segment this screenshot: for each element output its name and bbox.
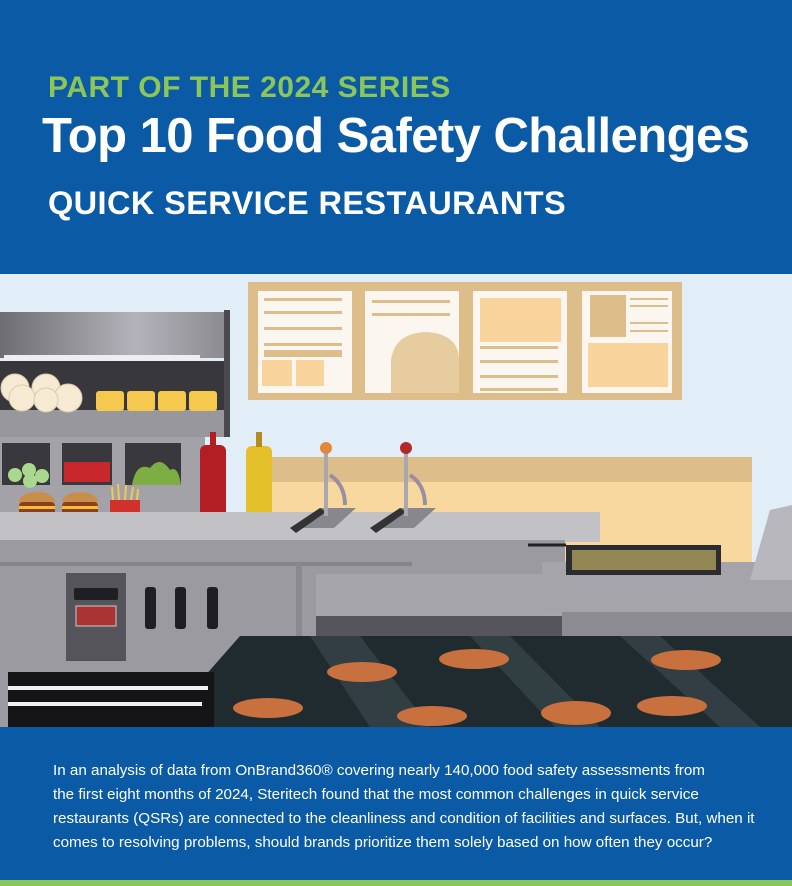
- menu board: [248, 282, 682, 400]
- intro paragraph: the first eight months of 2024, Steritech found that the most common challenges in quick service: [53, 786, 699, 803]
- intro paragraph: In an analysis of data from OnBrand360® covering nearly 140,000 food safety assessments from: [53, 762, 705, 779]
- intro paragraph: comes to resolving problems, should brands prioritize them solely based on how often they occur?: [53, 834, 712, 851]
- subtitle: quick service restaurants: QUICK SERVICE RESTAURANTS: [48, 185, 566, 221]
- napkin dispensers: [290, 442, 436, 533]
- ingredient bins and burgers: [0, 437, 205, 530]
- conveyor broiler: [160, 636, 792, 727]
- wall band: [270, 457, 752, 564]
- drawers: [8, 672, 214, 727]
- title: Top 10 Food Safety Challenges: [42, 109, 749, 163]
- kitchen illustration: [0, 274, 792, 727]
- header: [0, 0, 792, 274]
- intro paragraph: [53, 762, 755, 851]
- shelf unit: [0, 310, 230, 437]
- subtitle: series: PART OF THE 2024 SERIES: [48, 71, 451, 104]
- counter: [0, 512, 600, 727]
- condiment bottles: [200, 432, 272, 528]
- fryer: [528, 505, 792, 636]
- intro paragraph: restaurants (QSRs) are connected to the cleanliness and condition of facilities and surfaces. But, when it: [53, 810, 755, 827]
